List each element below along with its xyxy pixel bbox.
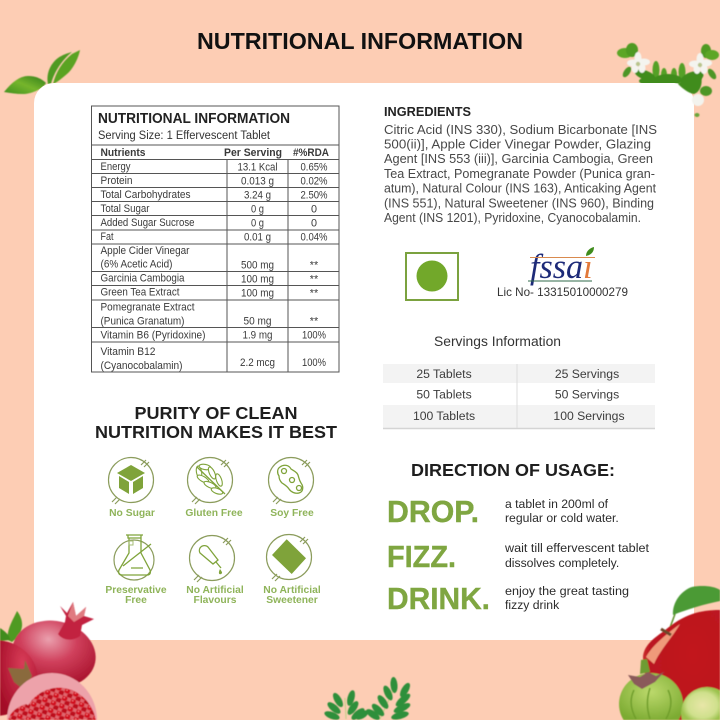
- table rows: 0: [311, 218, 317, 230]
- icon: no artificial flavours: [190, 536, 234, 582]
- label: gluten free: Gluten Free: [185, 508, 243, 519]
- table rows: (Cyanocobalamin): [100, 360, 182, 372]
- table rows: 0.01 g: [244, 232, 271, 244]
- heading: direction of usage: DIRECTION OF USAGE:: [411, 460, 615, 480]
- table rows: 50 mg: [244, 316, 272, 328]
- table rows: 1.9 mg: [242, 330, 272, 342]
- ingredients text: [384, 122, 657, 225]
- table rows: Apple Cider Vinegar: [100, 245, 190, 257]
- ingredients text: Agent (INS 1201), Pyridoxine, Cyanocobalamin.: [384, 210, 641, 225]
- table rows: 13.1 Kcal: [238, 162, 278, 174]
- table rows: **: [310, 260, 319, 272]
- table: servings: 50 Servings: [555, 388, 619, 402]
- table rows: 0.04%: [300, 232, 328, 244]
- table rows: Vitamin B6 (Pyridoxine): [100, 330, 206, 342]
- table rows: 0: [311, 204, 317, 216]
- heading: purity of clean nutrition: [95, 403, 337, 442]
- ingredients heading: INGREDIENTS: [384, 104, 471, 119]
- label: preservative free: Preservative: [105, 585, 167, 596]
- label: no artificial flavours: No Artificial: [186, 585, 244, 596]
- label: no artificial sweetener: Sweetener: [266, 595, 318, 606]
- table rows: (6% Acetic Acid): [100, 258, 172, 270]
- icon: vegetarian mark: [406, 253, 458, 300]
- label: no artificial flavours: Flavours: [194, 595, 237, 606]
- table rows: 2.2 mcg: [240, 357, 275, 369]
- heading: purity of clean nutrition: NUTRITION MAKES IT BEST: [95, 422, 337, 442]
- step: fizz: dissolves completely.: [505, 556, 619, 570]
- table rows: 100 mg: [241, 288, 274, 300]
- step: fizz: [387, 539, 650, 574]
- step: drink: [387, 581, 629, 616]
- table rows: **: [310, 274, 319, 286]
- label: preservative free: [105, 585, 167, 606]
- column headers: Nutrients: [100, 147, 146, 159]
- decoration: pomegranates: [0, 602, 102, 720]
- label: preservative free: Free: [125, 595, 147, 606]
- decoration: apple and garcinia: [619, 586, 720, 720]
- serving size: Serving Size: 1 Effervescent Tablet: [98, 130, 271, 142]
- column headers: Per Serving: [224, 147, 282, 159]
- table rows: 100%: [302, 330, 326, 342]
- step: drink: fizzy drink: [505, 598, 560, 612]
- license number: Lic No- 13315010000279: [497, 285, 628, 299]
- step: drop: a tablet in 200ml of: [505, 497, 609, 511]
- label: no artificial sweetener: No Artificial: [263, 585, 321, 596]
- ingredients text: atum), Natural Colour (INS 163), Anticaking Agent: [384, 180, 656, 196]
- ingredients text: Agent [INS 553 (iii)], Garcinia Cambogia, Green: [384, 151, 653, 166]
- label: soy free: Soy Free: [270, 508, 314, 519]
- table rows: Pomegranate Extract: [100, 302, 194, 314]
- table rows: **: [310, 316, 319, 328]
- table rows: Green Tea Extract: [100, 286, 180, 298]
- title: NUTRITIONAL INFORMATION: [197, 28, 523, 54]
- table rows: 0 g: [251, 204, 264, 216]
- step: fizz: wait till effervescent tablet: [504, 541, 650, 555]
- table rows: 3.24 g: [244, 190, 271, 202]
- table rows: 0.65%: [300, 162, 328, 174]
- step: drop: [387, 494, 619, 529]
- icon: no sugar: [108, 458, 154, 504]
- logo: fssai: fssa: [530, 247, 583, 286]
- label: no artificial flavours: [186, 585, 244, 606]
- step: fizz: FIZZ.: [387, 539, 456, 574]
- step: drop: regular or cold water.: [505, 511, 619, 525]
- table rows: 100%: [302, 357, 326, 369]
- table rows: Added Sugar Sucrose: [100, 217, 194, 229]
- table: servings: [383, 364, 655, 428]
- table rows: 100 mg: [241, 274, 274, 286]
- servings heading: Servings Information: [434, 334, 561, 349]
- table rows: [100, 161, 328, 372]
- ingredients text: (INS 551), Natural Sweetener (INS 960), Binding: [384, 196, 654, 210]
- table rows: Garcinia Cambogia: [100, 272, 184, 284]
- table rows: Vitamin B12: [100, 346, 156, 358]
- table: servings: 100 Tablets: [413, 409, 475, 423]
- decoration: top-left tea leaves: [4, 50, 80, 94]
- heading: purity of clean nutrition: PURITY OF CLEAN: [134, 403, 298, 423]
- table: servings: 25 Servings: [555, 367, 619, 381]
- step: drop: DROP.: [387, 494, 479, 529]
- table rows: 2.50%: [300, 190, 328, 202]
- table rows: Total Carbohydrates: [100, 189, 191, 201]
- table rows: 500 mg: [241, 260, 274, 272]
- table rows: Protein: [100, 175, 132, 187]
- table rows: 0 g: [251, 218, 264, 230]
- decoration: bottom leaves: [323, 677, 412, 720]
- table rows: Energy: [100, 161, 131, 173]
- table rows: (Punica Granatum): [100, 316, 184, 328]
- table: servings: 25 Tablets: [416, 367, 472, 381]
- table rows: Fat: [100, 231, 114, 243]
- column headers: [100, 147, 329, 159]
- ingredients text: 500(ii)], Apple Cider Vinegar Powder, Glazing: [384, 136, 651, 152]
- icon: gluten free: [188, 458, 232, 504]
- table rows: Total Sugar: [100, 203, 150, 215]
- table rows: 0.02%: [300, 176, 328, 188]
- table rows: 0.013 g: [241, 176, 274, 188]
- panel: main white card: [34, 83, 694, 640]
- table rows: **: [310, 288, 319, 300]
- icon: no artificial sweetener: [266, 534, 312, 581]
- ingredients text: Tea Extract, Pomegranate Powder (Punica gran-: [384, 166, 655, 181]
- icon: preservative free: [114, 535, 154, 580]
- decoration: flower over card: [678, 76, 704, 117]
- table heading: NUTRITIONAL INFORMATION: [98, 111, 290, 127]
- logo: fssai: ı: [583, 247, 593, 286]
- step: drink: DRINK.: [387, 581, 490, 616]
- table: servings: 100 Servings: [553, 409, 625, 423]
- step: drink: enjoy the great tasting: [505, 584, 629, 598]
- label: no sugar: No Sugar: [109, 508, 155, 519]
- ingredients text: Citric Acid (INS 330), Sodium Bicarbonate [INS: [384, 122, 657, 137]
- table: servings: 50 Tablets: [416, 388, 472, 402]
- panel: nutrition table: [92, 106, 339, 372]
- label: no artificial sweetener: [263, 585, 321, 606]
- column headers: #%RDA: [293, 147, 329, 159]
- decoration: top-right flowers: [617, 43, 719, 96]
- icon: soy free: [268, 458, 314, 504]
